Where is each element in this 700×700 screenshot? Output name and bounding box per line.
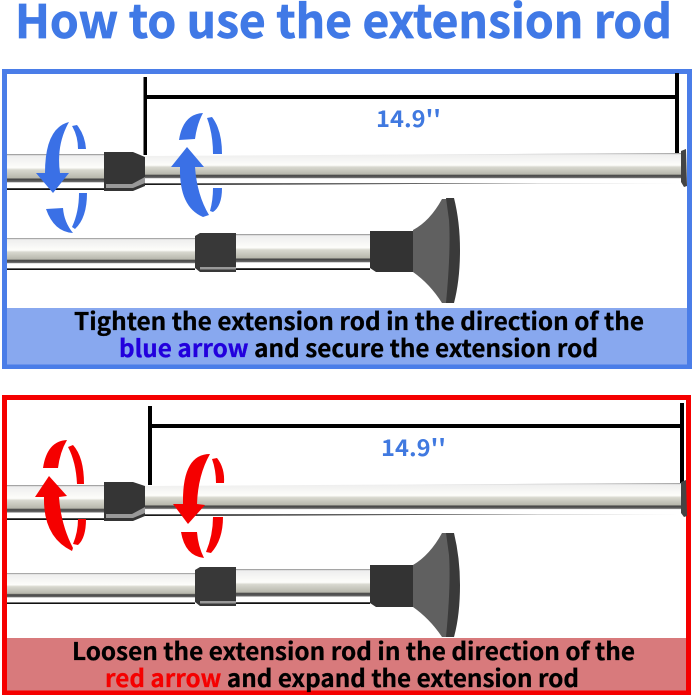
lower rod with suction cup: red panel	[7, 533, 460, 637]
caption band: blue panel: Tighten the extension rod in the direction of the	[74, 302, 644, 337]
caption band: blue panel	[7, 302, 687, 364]
icon: rotation arrow right, pointing down	[173, 454, 224, 558]
panel frame: red	[4, 398, 688, 692]
dimension bracket: red panel	[148, 403, 684, 485]
icon: rotation arrow left, pointing down	[36, 122, 87, 233]
upper rod: blue panel	[7, 149, 687, 191]
upper rod: red panel	[7, 480, 687, 521]
caption band: red panel: red arrow and expand the extension rod	[105, 659, 579, 694]
caption band: red panel: Loosen the extension rod in the direction of the	[72, 632, 635, 667]
measurement label: blue panel: 14.9''	[376, 100, 441, 134]
panel: tighten (blue)	[4, 72, 690, 366]
panel: loosen (red)	[4, 398, 688, 694]
dimension bracket: blue panel	[144, 73, 679, 155]
icon: rotation arrow left, pointing up	[35, 440, 86, 551]
caption band: blue panel: blue arrow and secure the extension rod	[119, 329, 598, 364]
measurement label: red panel: 14.9''	[381, 429, 446, 463]
caption band: red panel	[7, 632, 686, 694]
lower rod with suction cup: blue panel	[7, 198, 460, 303]
icon: rotation arrow right, pointing up	[171, 113, 222, 217]
panel frame: blue	[4, 72, 690, 366]
